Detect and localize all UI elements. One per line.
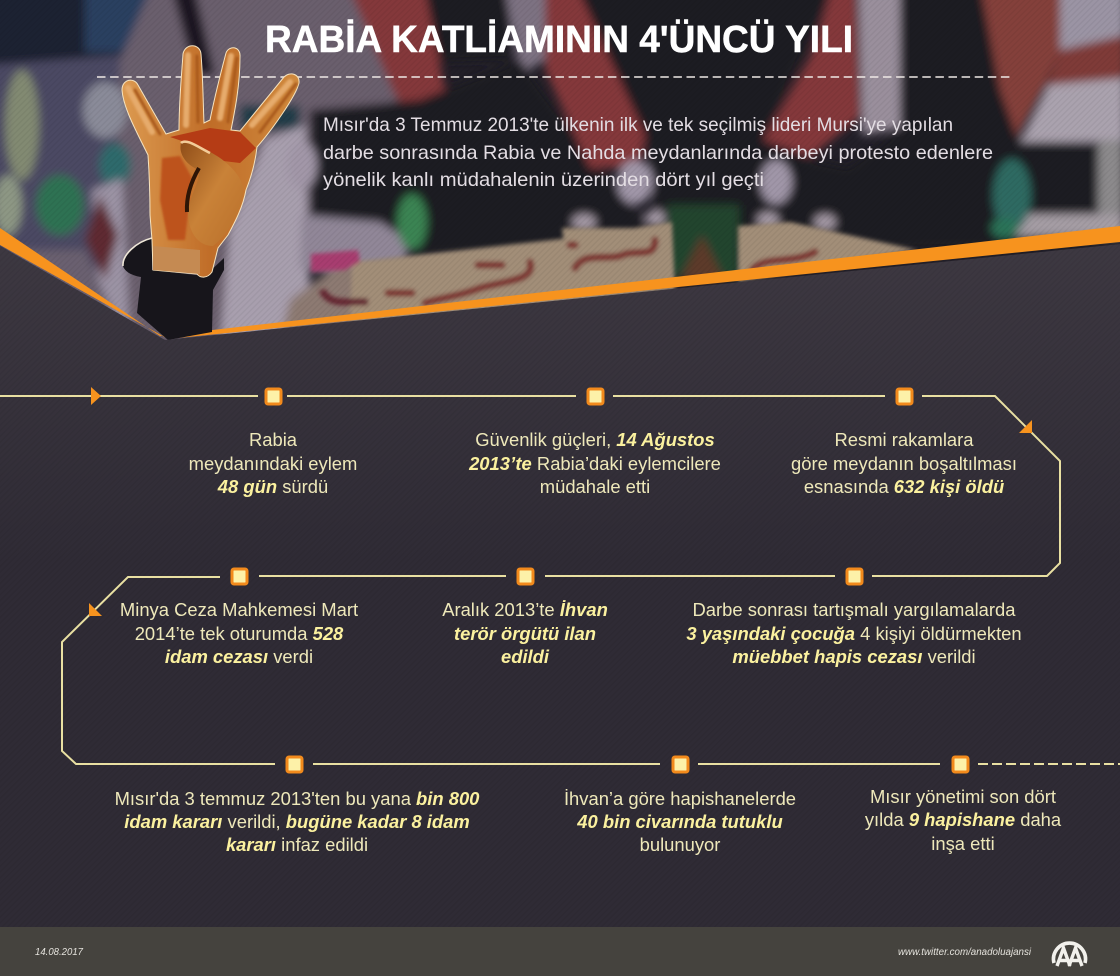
footer bar (0, 927, 1120, 976)
intro text: yönelik kanlı müdahalenin üzerinden dört yıl geçti (323, 169, 764, 191)
text: Ikhwan terror listing: terör örgütü ilan (454, 623, 596, 644)
title: RABİA KATLİAMININ 4'ÜNCÜ YILI (265, 18, 853, 61)
text: 14 August: Güvenlik güçleri, 14 Ağustos (475, 429, 715, 450)
text: 9 prisons: yılda 9 hapishane daha (865, 809, 1062, 830)
finger highlights (128, 55, 290, 132)
red palm glow (170, 128, 256, 163)
text: 40 thousand detained (564, 788, 796, 855)
arrow: row 1 start (91, 387, 101, 405)
text: 632 killed: Resmi rakamlara (835, 429, 974, 450)
orange band (0, 226, 1120, 339)
icon: raised four-finger Rabia hand (122, 46, 299, 340)
text: 9 prisons: inşa etti (931, 833, 995, 854)
wrist (153, 246, 200, 274)
text: 40 thousand detained: İhvan’a göre hapishanelerde (564, 788, 796, 809)
text: 3-year-old sentenced: müebbet hapis cezası verildi (732, 646, 976, 667)
marker 3 (897, 389, 912, 404)
text: 3-year-old sentenced: 3 yaşındaki çocuğa 4 kişiyi öldürmekten (686, 623, 1022, 644)
text: 528 death sentences (120, 599, 358, 667)
text: 40 thousand detained: bulunuyor (640, 834, 720, 855)
marker 2 (588, 389, 603, 404)
text: 528 death sentences: idam cezası verdi (165, 646, 313, 667)
text: 632 killed: göre meydanın boşaltılması (791, 453, 1017, 474)
text: Ikhwan terror listing: edildi (501, 646, 550, 667)
text: 800 death sentences (115, 788, 480, 855)
text: 48 days: meydanındaki eylem (189, 453, 357, 474)
text: 800 death sentences: kararı infaz edildi (226, 834, 368, 855)
footer link: www.twitter.com/anadoluajansi (898, 947, 1032, 958)
text: 800 death sentences: Mısır'da 3 temmuz 2013'ten bu yana bin 800 (115, 788, 480, 809)
hand silhouette (122, 46, 299, 277)
text: 800 death sentences: idam kararı verildi, bugüne kadar 8 idam (124, 811, 470, 832)
marker 7 (287, 757, 302, 772)
marker 9 (953, 757, 968, 772)
text: 632 killed: esnasında 632 kişi öldü (804, 476, 1004, 497)
text: 14 August: 2013’te Rabia’daki eylemcilere (468, 453, 721, 474)
text: 48 days: Rabia (249, 429, 298, 450)
text: 528 death sentences: Minya Ceza Mahkemesi Mart (120, 599, 358, 620)
dashed rule under title (97, 76, 1010, 78)
text: 48 days (189, 429, 357, 497)
lower texture (0, 244, 1120, 927)
header photo: tan banners with arabic lettering (311, 222, 917, 325)
text: 40 thousand detained: 40 bin civarında tutuklu (576, 811, 783, 832)
text: 9 prisons: Mısır yönetimi son dört (870, 786, 1056, 807)
text: 14 August: müdahale etti (540, 476, 650, 497)
text: 528 death sentences: 2014’te tek oturumda 528 (135, 623, 344, 644)
sleeve (123, 238, 224, 340)
marker 6 (232, 569, 247, 584)
text: 3-year-old sentenced (686, 599, 1022, 667)
thumb and folded fingers (180, 142, 237, 246)
icon: AA logo (1054, 943, 1086, 966)
marker 8 (673, 757, 688, 772)
footer date: 14.08.2017 (35, 947, 83, 958)
header photo: blurred protest crowd (0, 0, 1120, 345)
arrow: left bend (89, 603, 102, 616)
text: 3-year-old sentenced: Darbe sonrası tartışmalı yargılamalarda (692, 599, 1016, 620)
marker 1 (266, 389, 281, 404)
marker 5 (518, 569, 533, 584)
arrow: top right bend (1019, 420, 1032, 433)
text: 9 prisons (865, 786, 1062, 854)
text: 48 days: 48 gün sürdü (217, 476, 328, 497)
marker 4 (847, 569, 862, 584)
intro text: darbe sonrasında Rabia ve Nahda meydanlarında darbeyi protesto edenlere (323, 142, 993, 164)
text: Ikhwan terror listing (442, 599, 608, 667)
intro text (323, 114, 993, 191)
text: 632 killed (791, 429, 1017, 497)
intro text: Mısır'da 3 Temmuz 2013'te ülkenin ilk ve tek seçilmiş lideri Mursi'ye yapılan (323, 114, 953, 136)
text: Ikhwan terror listing: Aralık 2013’te İhvan (442, 599, 608, 620)
text: 14 August (468, 429, 721, 497)
timeline path (0, 396, 1120, 764)
